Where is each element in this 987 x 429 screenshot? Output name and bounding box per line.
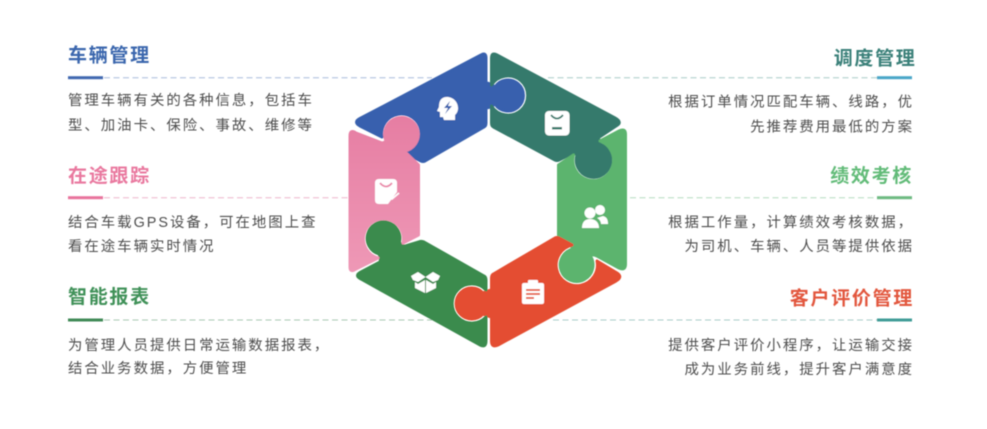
heading: in-transit tracking: 在途跟踪 <box>68 164 151 187</box>
icon: clipboard <box>522 280 544 304</box>
text: vehicle management description <box>68 92 314 134</box>
heading: customer review management: 客户评价管理 <box>790 286 914 310</box>
heading: vehicle management: 车辆管理 <box>68 44 151 66</box>
puzzle piece: pink <box>350 118 418 271</box>
puzzle piece: dark green <box>358 222 486 346</box>
text: in-transit tracking description: 看在途车辆实时情况 <box>68 238 216 255</box>
chart: puzzle hexagon ring <box>350 54 626 346</box>
text: performance review description: 根据工作量，计算绩效考核数据， <box>668 214 914 231</box>
text: customer review management description: 提供客户评价小程序，让运输交接 <box>668 336 914 354</box>
text: in-transit tracking description <box>68 214 317 255</box>
text: smart reports description: 结合业务数据，方便管理 <box>68 360 248 377</box>
panel: performance review <box>630 164 914 255</box>
text: in-transit tracking description: 结合车载GPS设备，可在地图上查 <box>68 214 317 231</box>
icon: tablet with smile <box>545 111 570 136</box>
panel: dispatch management <box>548 46 916 136</box>
text: performance review description: 为司机、车辆、人员等提供依据 <box>685 237 914 255</box>
text: dispatch management description: 先推荐费用最低的方案 <box>750 118 914 136</box>
text: dispatch management description: 根据订单情况匹配车辆、线路，优 <box>668 94 914 110</box>
text: customer review management description: 成为业务前线，提升客户满意度 <box>685 360 914 378</box>
icon: people <box>582 205 608 228</box>
panel: in-transit tracking <box>68 164 348 255</box>
panel: customer review management <box>553 286 914 378</box>
text: performance review description <box>668 214 914 255</box>
puzzle piece: blue <box>356 54 523 162</box>
puzzle piece: green <box>558 130 626 281</box>
text: smart reports description: 为管理人员提供日常运输数据报表， <box>68 337 330 354</box>
puzzle piece: orange <box>456 238 620 346</box>
heading: smart reports: 智能报表 <box>68 286 151 308</box>
panel: vehicle management <box>68 44 432 134</box>
text: smart reports description <box>68 337 330 377</box>
icon: head with lightning <box>437 97 458 120</box>
text: dispatch management description <box>668 94 914 136</box>
text: customer review management description <box>668 336 914 378</box>
icon: checked card <box>375 179 399 204</box>
icon: open box <box>411 272 440 293</box>
heading: dispatch management: 调度管理 <box>834 46 916 70</box>
panel: smart reports <box>68 286 432 377</box>
heading: performance review: 绩效考核 <box>830 164 913 187</box>
puzzle piece: teal <box>492 54 619 177</box>
text: vehicle management description: 型、加油卡、保险、事故、维修等 <box>68 116 314 134</box>
text: vehicle management description: 管理车辆有关的各种信息，包括车 <box>68 92 314 109</box>
